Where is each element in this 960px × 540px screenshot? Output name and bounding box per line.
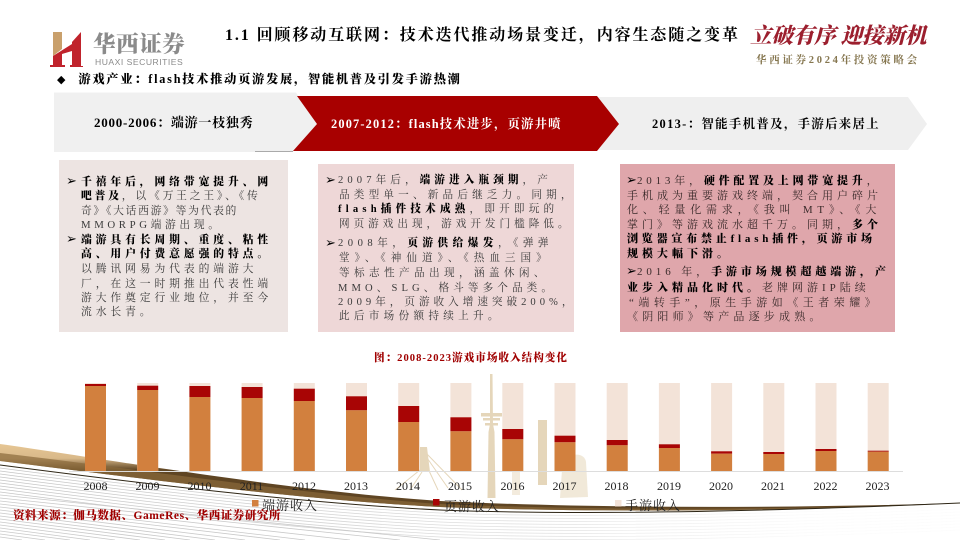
bullet text 2: 2009年，页游收入增速突破200%，: [338, 297, 576, 308]
source note: 资料来源：伽马数据、GameRes、华西证券研究所: [13, 510, 281, 522]
bullet text 2: 等标志性产品出现，涵盖休闲、: [339, 268, 549, 279]
bullet text 1: 规模大幅下滑。: [627, 248, 732, 260]
year axis labels: 2022: [814, 479, 838, 493]
bullet text 2: 2008年，页游供给爆发，《弹弹: [338, 238, 553, 249]
year axis labels: 2013: [344, 479, 368, 493]
year axis labels: 2016: [500, 479, 524, 493]
bullet text 2: 端游具有长周期、重度、粘性: [81, 234, 272, 246]
slogan subtitle: 华西证券2024年投资策略会: [756, 55, 920, 66]
bullet text 2: ➢: [66, 232, 77, 247]
timeline arrows: [54, 92, 927, 152]
panel: 2013+ mobile games: [620, 164, 895, 332]
bullet text 2: 高、用户付费意愿强的特点。: [81, 248, 272, 260]
bullet text 1: ➢: [626, 173, 637, 188]
year axis labels: 2009: [136, 479, 160, 493]
bullet text 2: [325, 236, 576, 322]
year axis labels: 2011: [240, 479, 263, 493]
bullet text 2: 以腾讯网易为代表的端游大: [81, 263, 257, 275]
year axis labels: 2020: [709, 479, 733, 493]
title: 1.1 回顾移动互联网：技术迭代推动场景变迁，内容生态随之变革: [225, 27, 740, 44]
year axis labels: 2023: [866, 479, 890, 493]
bullet text 2: 游大作奠定行业地位，并至今: [81, 292, 272, 304]
panel: 2000-2006 PC games: [59, 160, 288, 332]
year axis labels: 2017: [552, 479, 576, 493]
bullet text 1: 手机成为重要游戏终端，契合用户碎片: [627, 190, 882, 202]
legend: [252, 498, 681, 514]
bullet text 1: 掌门》等游戏流水超千万。同期，多个: [627, 219, 882, 231]
bullet text 1: 品类型单一、新品后继乏力。同期，: [339, 190, 576, 201]
bullet text 1: 浏览器宣布禁止flash插件，页游市场: [627, 233, 876, 245]
legend: 端游收入: [262, 498, 318, 513]
bullet text 2: 厂，在这一时期推出代表性端: [81, 278, 272, 290]
bullet text 1: 奇》《大话西游》等为代表的: [81, 205, 238, 217]
bullet text 2: 此后市场份额持续上升。: [339, 311, 503, 322]
bullet text 2: 业步入精品化时代。老牌网游IP陆续: [627, 282, 870, 294]
arrow label: 2007-2012: 2007-2012：flash技术进步，页游井喷: [331, 117, 562, 131]
year axis labels: 2010: [188, 479, 212, 493]
bullet text 1: 千禧年后，网络带宽提升、网: [81, 176, 272, 188]
subheading: ◆ 游戏产业：flash技术推动页游发展，智能机普及引发手游热潮: [57, 72, 462, 86]
bullet text 1: MMORPG端游出现。: [81, 219, 223, 231]
bullet text 2: 流水长青。: [81, 306, 154, 318]
legend: 手游收入: [625, 498, 681, 513]
bullet text 2: 2016 年，手游市场规模超越端游，产: [637, 266, 890, 278]
bullet text 2: MMO、SLG、格斗等多个品类。: [338, 283, 556, 294]
bullet text 1: flash插件技术成熟，即开即玩的: [338, 204, 558, 215]
arrow label: 2000-2006: 2000-2006：端游一枝独秀: [94, 115, 253, 130]
bullet text 2: ➢: [626, 264, 637, 279]
bullet text 2: 《阴阳师》等产品逐步成熟。: [627, 311, 825, 323]
logo: Huaxi Securities: [50, 27, 185, 67]
year axis labels: 2014: [396, 479, 420, 493]
year axis labels: [84, 479, 890, 493]
year axis labels: 2015: [448, 479, 472, 493]
bullet text 2: 堂》、《神仙道》、《热血三国》: [339, 253, 552, 264]
bullet text 1: ➢: [66, 174, 77, 189]
legend: 页游收入: [444, 499, 500, 514]
conference slogan: [750, 24, 928, 66]
year axis labels: 2019: [657, 479, 681, 493]
logo english name: HUAXI SECURITIES: [95, 57, 183, 67]
bullet text 1: 2007年后，端游进入瓶颈期，产: [338, 175, 552, 186]
panel: 2007-2012 web games: [318, 164, 574, 332]
bullet text 1: [626, 173, 882, 260]
slogan headline: 立破有序 迎接新机: [750, 24, 926, 48]
year axis labels: 2008: [84, 479, 108, 493]
year axis labels: 2021: [761, 479, 785, 493]
icon: H mark: [50, 32, 83, 67]
bullet text 2: [66, 232, 272, 318]
bullet text 1: 吧普及，以《万王之王》、《传: [81, 190, 261, 202]
year axis labels: 2018: [604, 479, 628, 493]
logo wordmark: 华西证券: [93, 27, 185, 59]
bullet text 1: 化、轻量化需求，《我叫 MT》、《大: [627, 204, 881, 216]
bullet text 2: “端转手”，原生手游如《王者荣耀》: [629, 297, 880, 309]
arrow shapes: [54, 92, 927, 152]
bullet text 1: 网页游戏出现，游戏开发门槛降低。: [339, 219, 572, 230]
bars: mobile, web, PC revenue by year: [85, 383, 889, 471]
chart title: 图：2008-2023游戏市场收入结构变化: [374, 353, 568, 364]
bullet text 1: [325, 173, 576, 230]
bullet text 1: ➢: [325, 173, 336, 188]
arrow label: 2013-: 2013-：智能手机普及，手游后来居上: [652, 117, 880, 131]
bullet text 1: [66, 174, 272, 231]
bullet text 2: [626, 264, 890, 323]
bullet text 2: ➢: [325, 236, 336, 251]
bullet text 1: 2013年，硬件配置及上网带宽提升，: [637, 175, 881, 187]
year axis labels: 2012: [292, 479, 316, 493]
